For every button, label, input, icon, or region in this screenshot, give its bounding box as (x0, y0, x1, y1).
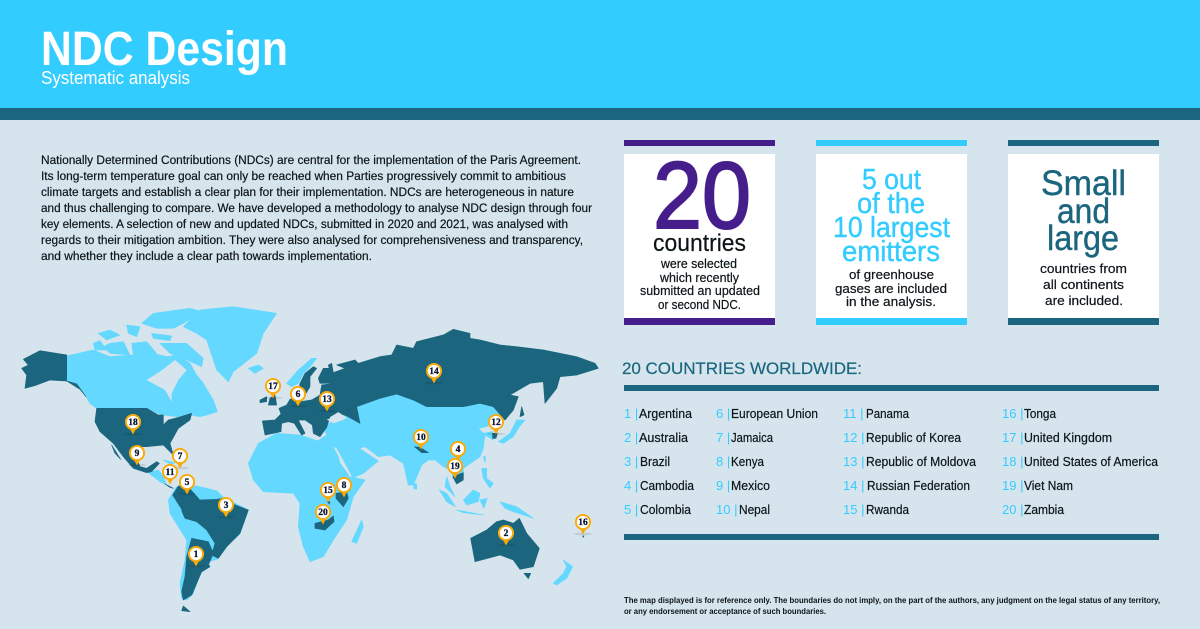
pin: 5 Colombia: 5 (185, 478, 190, 488)
pin: 13 Republic of Moldova: 13 (322, 395, 332, 405)
column 3: Panama (866, 406, 910, 421)
list heading: 20 COUNTRIES WORLDWIDE: (622, 359, 862, 378)
pin: 14 Russian Federation: 14 (429, 367, 439, 377)
column 1: 3 | (624, 454, 638, 469)
land: non-selected countries (67, 307, 573, 600)
column 1: 5 | (624, 502, 638, 517)
pin: 20 Zambia: 20 (318, 508, 328, 518)
subtitle: Systematic analysis (41, 68, 190, 88)
pin: 13 Republic of Moldova (318, 392, 336, 412)
country list (624, 385, 1159, 540)
emitters highlight: 5 out (862, 164, 921, 196)
card text: in the analysis. (846, 294, 936, 309)
column 4: 17 | (1002, 430, 1023, 445)
disclaimer: The map displayed is for reference only. The boundaries do not imply, on the part of the authors, any judgment on the legal status of any territory, (624, 595, 1160, 605)
card text: gases are included (835, 281, 947, 296)
pin: 7 Jamaica (171, 449, 189, 469)
column 3: 13 | (843, 454, 864, 469)
intro paragraph: and whether they include a clear path towards implementation. (41, 249, 372, 263)
pin: 15 Rwanda: 15 (323, 486, 333, 496)
pin: 18 United States of America (124, 415, 142, 435)
pin: 14 Russian Federation (425, 364, 443, 384)
column 1: 2 | (624, 430, 638, 445)
pin: 4 Cambodia (451, 442, 465, 462)
column 4: 20 | (1002, 502, 1023, 517)
column 3: 15 | (843, 502, 864, 517)
column 1: Argentina (639, 406, 693, 421)
water cut-outs (147, 360, 352, 477)
big number 20: 20 (653, 143, 751, 249)
column 3: Republic of Korea (866, 430, 962, 445)
intro paragraph: key elements. A selection of new and updated NDCs, submitted in 2020 and 2021, was analysed with (41, 217, 568, 231)
intro paragraph: Nationally Determined Contributions (NDCs) are central for the implementation of the Paris Agreement. (41, 153, 581, 167)
column 2: Jamaica (731, 430, 774, 445)
column 4: United States of America (1024, 454, 1159, 469)
pin: 16 Tonga: 16 (578, 518, 588, 528)
pin: 6 European Union: 6 (296, 390, 301, 400)
column 2: Mexico (731, 478, 770, 493)
column 1: 4 | (624, 478, 638, 493)
column 2: European Union (731, 406, 818, 421)
pin: 9 Mexico: 9 (135, 449, 140, 459)
column 3: Russian Federation (867, 478, 970, 493)
pin: 19 Viet Nam: 19 (450, 462, 460, 472)
column 3: Republic of Moldova (866, 454, 977, 469)
emitters highlight: 10 largest (833, 212, 950, 244)
column 3: 14 | (843, 478, 864, 493)
card text: countries from (1040, 261, 1127, 276)
intro paragraph: and thus challenging to compare. We have developed a methodology to analyse NDC design through four (41, 201, 592, 215)
column 4: 16 | (1002, 406, 1023, 421)
column 3: 11 | (843, 406, 863, 421)
pin: 16 Tonga (574, 515, 592, 535)
pin: 2 Australia: 2 (504, 529, 509, 539)
pin: 11 Panama: 11 (166, 468, 175, 478)
panel: small and large (1008, 140, 1159, 325)
card text: all continents (1043, 277, 1125, 292)
pin: 1 Argentina: 1 (194, 550, 199, 560)
column 4: Zambia (1024, 502, 1065, 517)
column 1: 1 | (624, 406, 638, 421)
intro paragraph: Its long-term temperature goal can only be reached when Parties progressively commit to ambitious (41, 169, 566, 183)
pin: 8 Kenya: 8 (342, 481, 347, 491)
pin: 12 Republic of Korea: 12 (491, 418, 501, 428)
column 1: Brazil (640, 454, 670, 469)
card text: countries (653, 230, 746, 257)
land: selected countries (22, 329, 598, 612)
pin: 2 Australia (497, 526, 515, 546)
intro paragraph (41, 153, 592, 263)
column 2: Nepal (739, 502, 770, 517)
card text: are included. (1045, 293, 1123, 308)
intro paragraph: climate targets and establish a clear plan for their implementation. NDCs are heterogeneous in nature (41, 185, 574, 199)
column 4: 18 | (1002, 454, 1023, 469)
small and large highlight (1041, 164, 1126, 258)
column 1: Cambodia (640, 478, 695, 493)
pin: 1 Argentina (187, 547, 205, 567)
pin: 5 Colombia (178, 475, 196, 495)
world map (22, 307, 598, 612)
pin: 18 United States of America: 18 (128, 418, 138, 428)
column 1 (624, 406, 695, 517)
pin: 12 Republic of Korea (487, 415, 505, 435)
pin: 10 Nepal (414, 430, 428, 450)
pin: 20 Zambia (316, 505, 330, 524)
pin: 19 Viet Nam (448, 459, 462, 478)
pin: 8 Kenya (337, 478, 351, 498)
column 2: 8 | (716, 454, 730, 469)
small and large highlight: Small (1041, 164, 1126, 203)
emitters highlight (833, 164, 950, 268)
column 3 (843, 406, 977, 517)
pin: 17 United Kingdom (264, 379, 282, 399)
pin: 3 Brazil (217, 498, 235, 518)
column 3: 12 | (843, 430, 864, 445)
column 1: Australia (639, 430, 689, 445)
card text (640, 230, 760, 312)
column 2: Kenya (731, 454, 765, 469)
card text: or second NDC. (658, 297, 741, 312)
pin: 17 United Kingdom: 17 (268, 382, 278, 392)
small and large highlight: large (1047, 219, 1119, 258)
disclaimer (624, 595, 1160, 616)
pin: 11 Panama (163, 465, 177, 484)
pin: 9 Mexico (128, 446, 146, 466)
emitters highlight: of the (857, 188, 925, 220)
small and large highlight: and (1057, 192, 1110, 231)
intro paragraph: regards to their mitigation ambition. They were also analysed for comprehensiveness and transparency, (41, 233, 583, 247)
card text: were selected (660, 256, 737, 271)
title: NDC Design (41, 23, 288, 76)
column 4: 19 | (1002, 478, 1023, 493)
pin: 4 Cambodia: 4 (456, 445, 461, 455)
header band (0, 0, 1200, 120)
panel: 5 out of 10 emitters (816, 140, 967, 325)
pin: 10 Nepal: 10 (416, 433, 426, 443)
panel: 20 countries (624, 140, 775, 325)
disclaimer: or any endorsement or acceptance of such boundaries. (624, 606, 826, 616)
pin: 6 European Union (289, 387, 307, 407)
column 2: 6 | (716, 406, 730, 421)
card text: of greenhouse (849, 267, 934, 282)
card text (835, 267, 947, 309)
column 2: 9 | (716, 478, 730, 493)
column 4: Tonga (1024, 406, 1057, 421)
card text (1040, 261, 1127, 308)
card text: submitted an updated (640, 283, 760, 298)
column 2 (716, 406, 818, 517)
pin: 7 Jamaica: 7 (178, 452, 183, 462)
pin: 3 Brazil: 3 (224, 501, 229, 511)
column 3: Rwanda (866, 502, 910, 517)
column 2: 7 | (716, 430, 730, 445)
column 1: Colombia (640, 502, 692, 517)
emitters highlight: emitters (842, 236, 940, 268)
column 4 (1002, 406, 1159, 517)
card text: which recently (659, 270, 739, 285)
column 2: 10 | (716, 502, 737, 517)
black sea (327, 415, 347, 423)
pin: 15 Rwanda (321, 483, 335, 502)
column 4: United Kingdom (1024, 430, 1112, 445)
column 4: Viet Nam (1024, 478, 1073, 493)
